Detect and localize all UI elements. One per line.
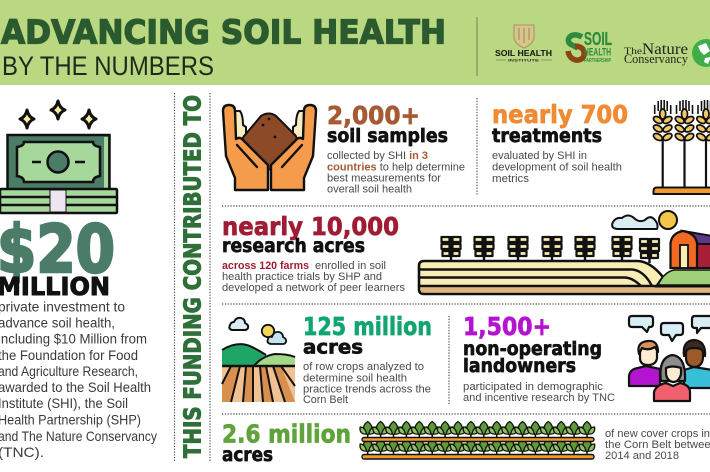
description: health practice trials by SHP and <box>222 271 382 283</box>
logo: Soil Health Partnership: SOIL <box>584 29 612 49</box>
stat: nearly 10,000: nearly 10,000 <box>222 212 399 241</box>
description: best measurements for <box>327 173 441 185</box>
logo: The Nature Conservancy: Conservancy <box>624 52 689 66</box>
logo: Soil Health Institute: INSTITUTE <box>508 58 540 62</box>
description: countries to help determine <box>327 162 465 174</box>
panel: 125 million acres <box>222 312 432 406</box>
funding description: the Foundation for Food <box>0 348 138 363</box>
description <box>303 361 431 406</box>
description: participated in demographic <box>463 381 603 393</box>
panel: research acres <box>222 211 710 294</box>
funding description: awarded to the Soil Health <box>0 380 151 395</box>
left funding panel <box>0 101 157 460</box>
description: and incentive research by TNC <box>463 392 615 404</box>
logo: The Nature Conservancy <box>624 39 710 67</box>
description: 2014 and 2018 <box>605 450 679 462</box>
logo: Soil Health Partnership: HEALTH <box>584 46 611 58</box>
label: non-operating landowners <box>463 338 602 377</box>
description <box>605 428 710 462</box>
logo: Soil Health Institute: SOIL HEALTH <box>495 48 552 58</box>
funding description: and The Nature Conservancy <box>0 429 157 444</box>
icon: landscape with plowed field <box>222 318 295 402</box>
header banner <box>0 0 710 85</box>
description: across 120 farms <box>222 260 309 272</box>
funding description: Institute (SHI), the Soil <box>0 396 128 411</box>
description: practice trends across the <box>303 384 431 396</box>
description: of row crops analyzed to <box>303 361 424 373</box>
stat: 2.6 million: 2.6 million <box>222 420 351 449</box>
stat: 125 million: 125 million <box>303 312 432 341</box>
description <box>492 150 622 185</box>
label: soil samples: soil samples <box>327 125 448 147</box>
icon: wheat <box>652 100 710 194</box>
stat: nearly 700: nearly 700 <box>492 100 628 129</box>
description: determine soil health <box>303 372 407 384</box>
label: non-operating landowners: landowners <box>463 355 576 377</box>
description <box>222 260 405 294</box>
vertical heading: THIS FUNDING CONTRIBUTED TO <box>180 95 206 458</box>
description: collected by SHI in 3 <box>327 150 428 162</box>
subtitle: BY THE NUMBERS <box>2 51 214 81</box>
title: ADVANCING SOIL HEALTH <box>1 12 446 52</box>
description: evaluated by SHI in <box>492 150 587 162</box>
icon: farm field with barn <box>419 211 710 294</box>
panel: landowners <box>463 312 710 404</box>
stat: 2,000+: 2,000+ <box>327 101 420 130</box>
funding description <box>0 300 157 460</box>
description: overall soil health <box>327 184 412 196</box>
stat: 1,500+: 1,500+ <box>463 312 551 341</box>
label: research acres: research acres <box>222 235 365 257</box>
icon: three people with speech bubbles <box>629 316 710 401</box>
funding description: Health Partnership (SHP) <box>0 412 141 428</box>
funding description: and Agriculture Research, <box>0 364 138 379</box>
label: acres: acres <box>222 444 273 466</box>
funding description: private investment to <box>0 300 125 314</box>
amount: $20: $20 <box>0 211 115 288</box>
panel: soil samples <box>223 101 465 196</box>
logo: Soil Health Partnership: PARTNERSHIP <box>584 58 612 64</box>
description: metrics <box>492 173 529 185</box>
logo: The Nature Conservancy: Nature <box>642 41 688 58</box>
logo: Soil Health Partnership <box>568 29 612 64</box>
description: enrolled in soil <box>315 260 386 272</box>
icon: money stack with sparkles <box>0 101 117 213</box>
icon: hands holding soil <box>223 105 316 190</box>
icon: rows of cover crops <box>360 422 595 459</box>
label: non-operating landowners: non-operating <box>463 338 602 360</box>
description: Corn Belt <box>303 394 349 406</box>
label: treatments: treatments <box>492 125 602 147</box>
description <box>327 150 465 196</box>
description: of new cover crops in <box>605 428 710 440</box>
logo: Soil Health Institute <box>495 25 552 62</box>
panel: treatments <box>492 100 710 194</box>
funding description: advance soil health, <box>0 316 115 330</box>
amount: million: MILLION <box>0 272 110 301</box>
funding description: including $10 Million from <box>0 332 147 347</box>
logo: The Nature Conservancy: The <box>624 47 642 57</box>
label: acres: acres <box>303 337 363 359</box>
description: development of soil health <box>492 162 622 174</box>
description <box>463 381 615 404</box>
description: developed a network of peer learners <box>222 282 405 294</box>
panel: cover crops <box>222 420 710 466</box>
